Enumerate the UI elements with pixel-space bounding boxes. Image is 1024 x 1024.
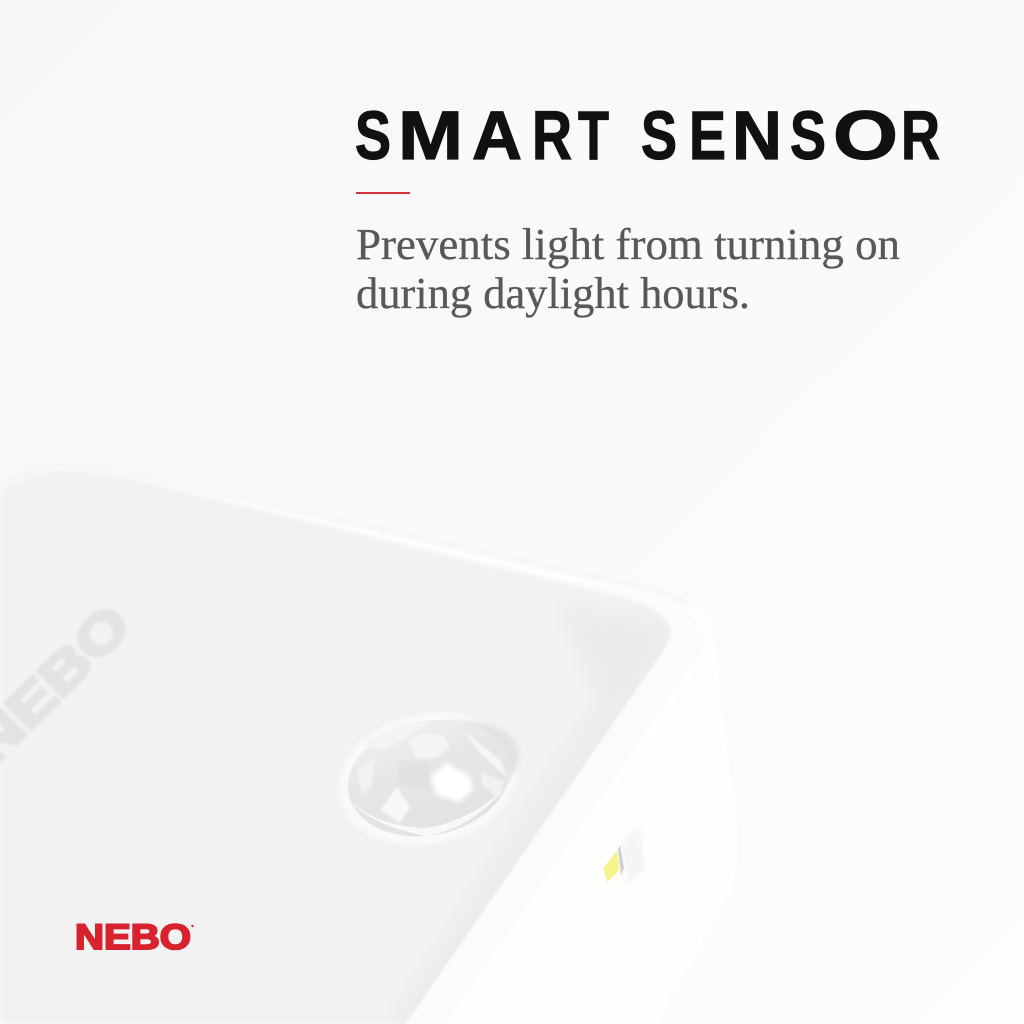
lens recess <box>326 697 530 861</box>
title: N <box>732 97 782 174</box>
title: S <box>641 97 677 174</box>
NEBO logo: NEBO <box>75 918 191 957</box>
red divider <box>356 192 410 194</box>
title: O <box>833 97 898 174</box>
rim highlight line <box>448 650 707 1024</box>
lens shadow <box>373 709 527 821</box>
lens dome <box>337 705 521 851</box>
description text <box>356 220 900 318</box>
LED recess <box>620 825 645 885</box>
title: A <box>472 97 522 174</box>
device side body <box>0 464 739 1024</box>
LED light <box>603 825 645 885</box>
device rim <box>0 490 708 1024</box>
inner corner shading <box>412 750 594 1013</box>
title: M <box>398 97 463 174</box>
device top surface <box>0 470 670 1024</box>
description text: during daylight hours. <box>356 269 750 318</box>
title: R <box>532 97 572 174</box>
device top edge shadow <box>0 466 690 606</box>
LED chip <box>603 850 620 883</box>
device: motion sensor light <box>0 564 670 1024</box>
sensor lens <box>326 697 530 861</box>
title: E <box>689 97 726 174</box>
title: T <box>578 97 609 174</box>
title: R <box>901 97 940 174</box>
lens facets <box>408 733 450 758</box>
description text: Prevents light from turning on <box>356 220 900 269</box>
title: S <box>790 97 826 174</box>
title: S <box>355 97 391 174</box>
